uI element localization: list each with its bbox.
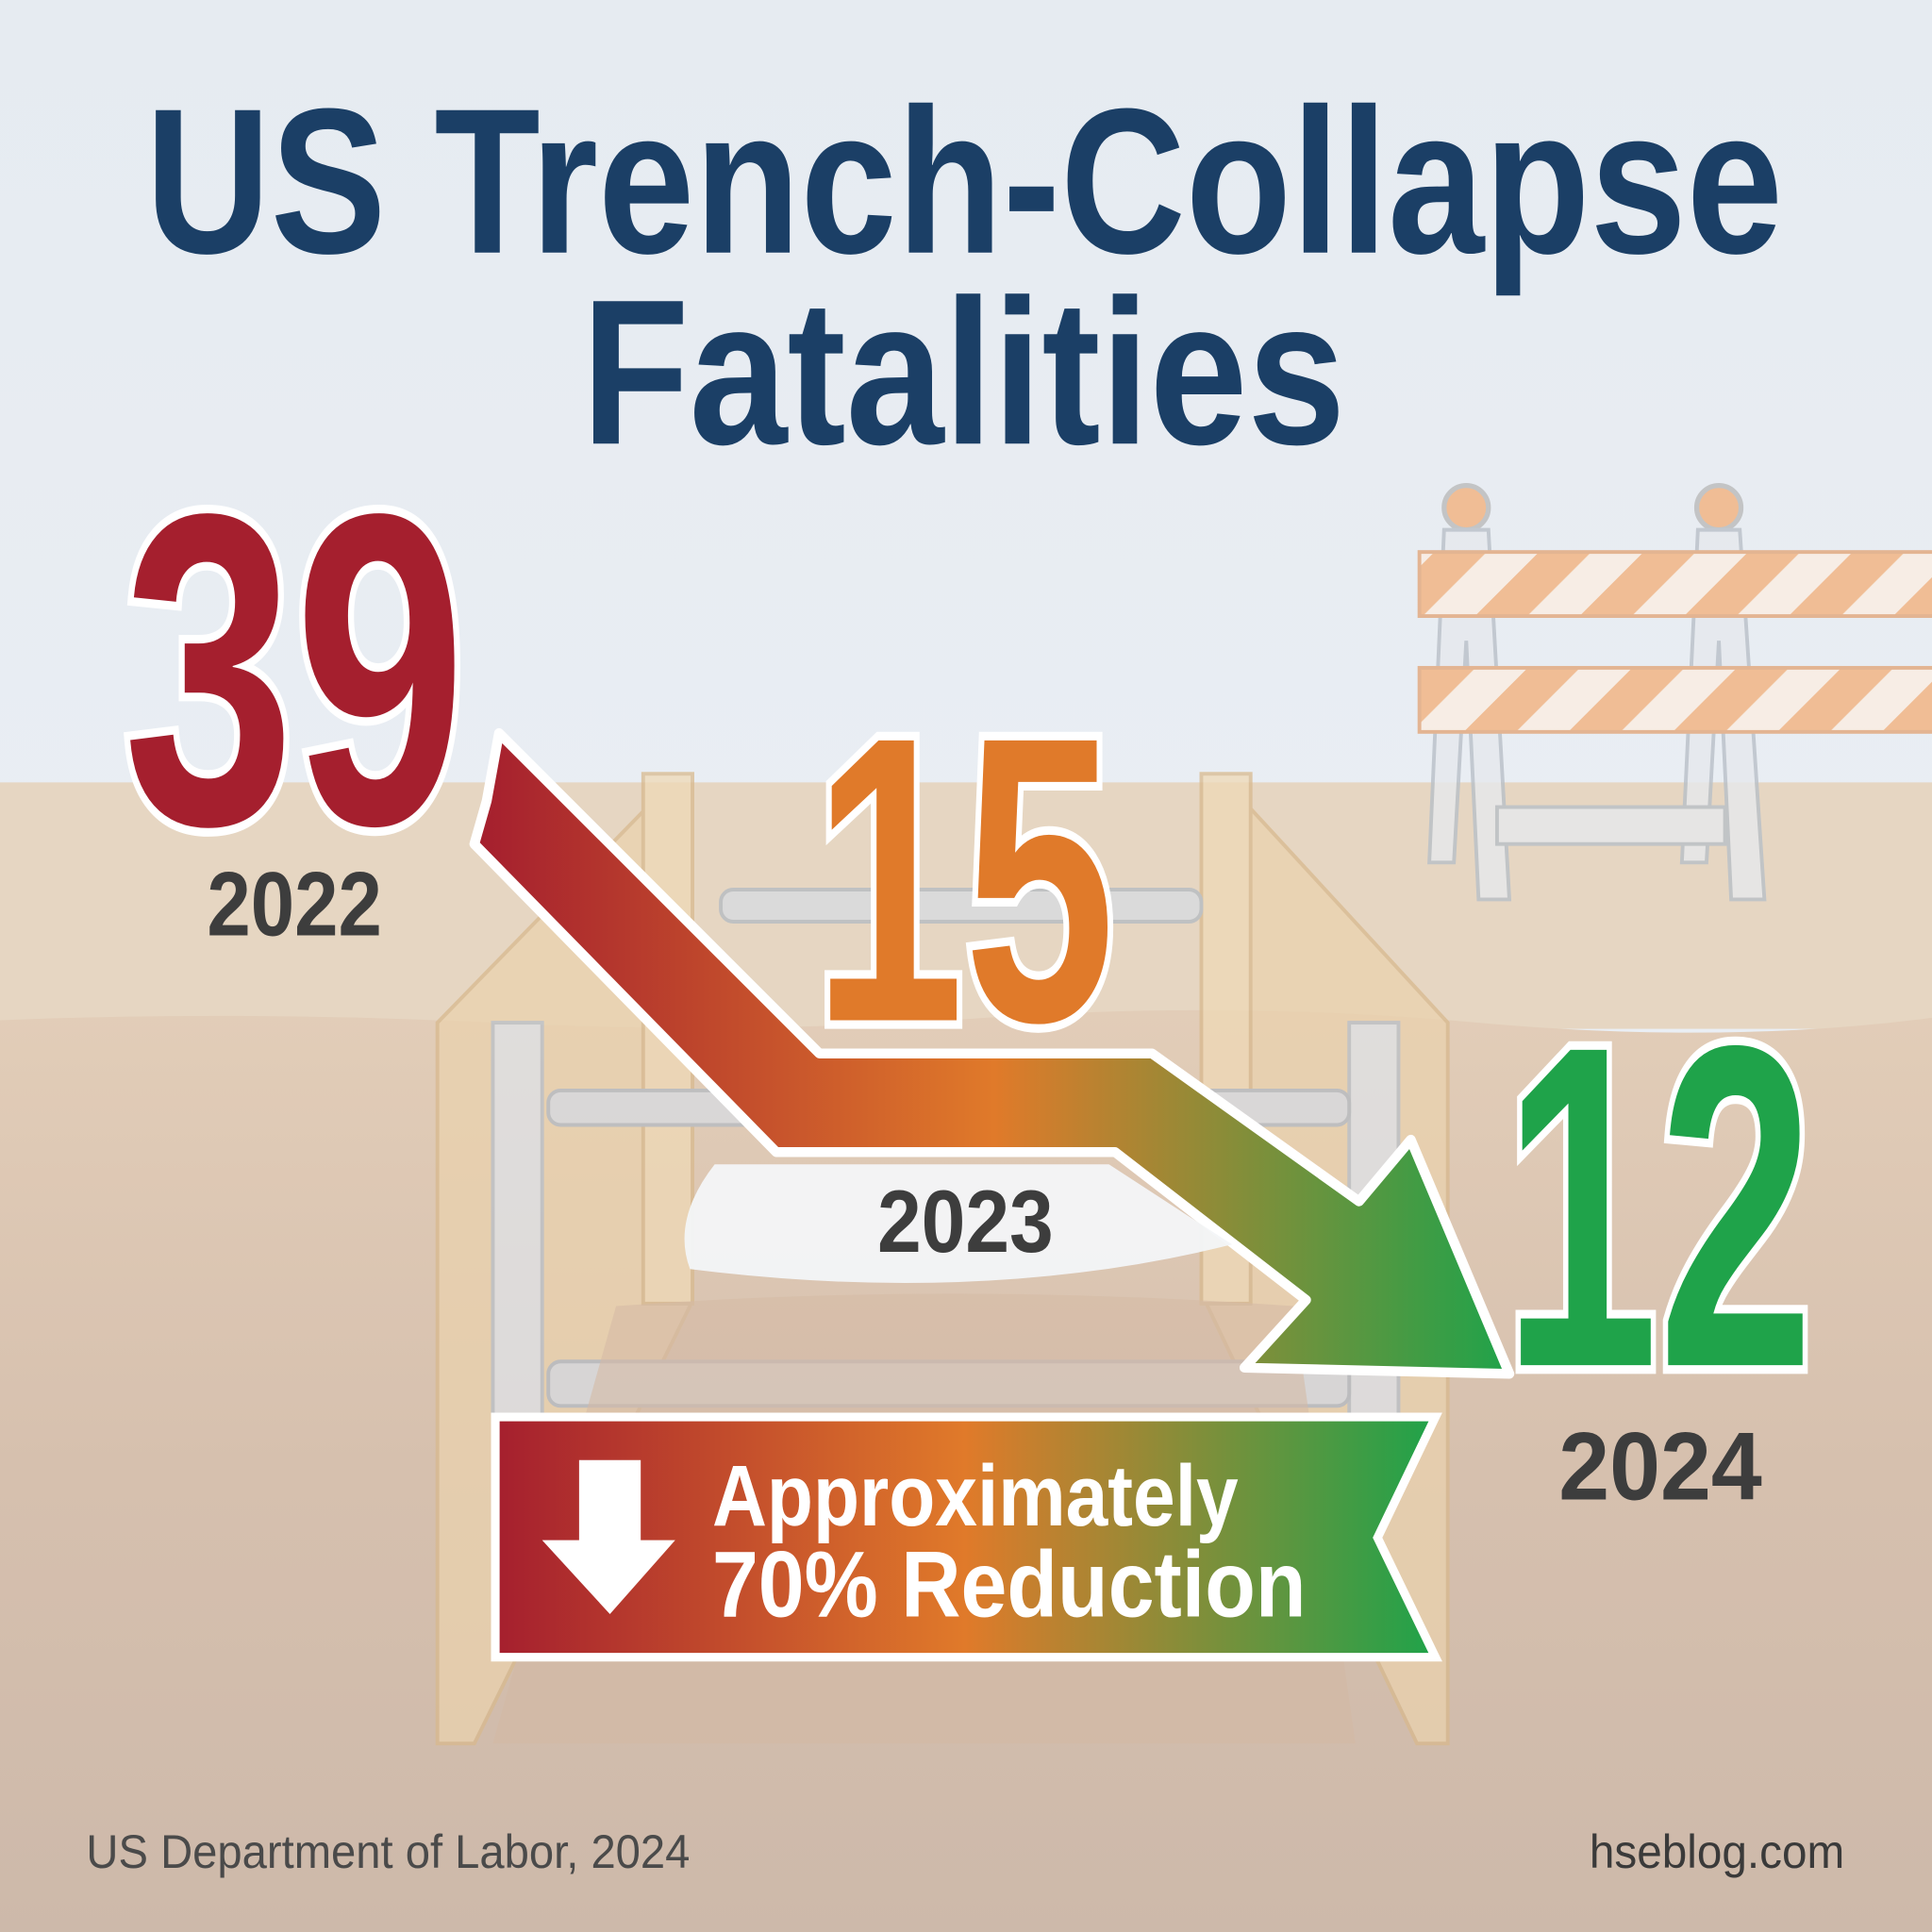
stat: 39 in 2022: 39 xyxy=(124,421,466,917)
site footer: hseblog.com xyxy=(1590,1825,1844,1878)
2023 label blob: 2023 xyxy=(877,1172,1054,1271)
stat: 12 in 2024 xyxy=(1503,950,1814,1521)
trend arrow xyxy=(475,733,1509,1374)
reduction banner xyxy=(495,1417,1436,1657)
2023 label blob xyxy=(685,1164,1232,1283)
stat: 39 in 2022 xyxy=(124,421,466,955)
source footer: US Department of Labor, 2024 xyxy=(86,1825,690,1878)
reduction banner: Approximately xyxy=(712,1448,1239,1544)
stat: 12 in 2024: 2024 xyxy=(1558,1413,1762,1521)
stat: 39 in 2022: 2022 xyxy=(207,854,382,955)
icon: down arrow xyxy=(542,1460,675,1614)
stat: 15 in 2023: 15 xyxy=(813,653,1115,1107)
title xyxy=(145,66,1783,488)
reduction banner: 70% Reduction xyxy=(712,1533,1306,1638)
barricade xyxy=(1420,486,1932,899)
trench shoring xyxy=(438,774,1448,1743)
title: Fatalities xyxy=(581,257,1345,488)
